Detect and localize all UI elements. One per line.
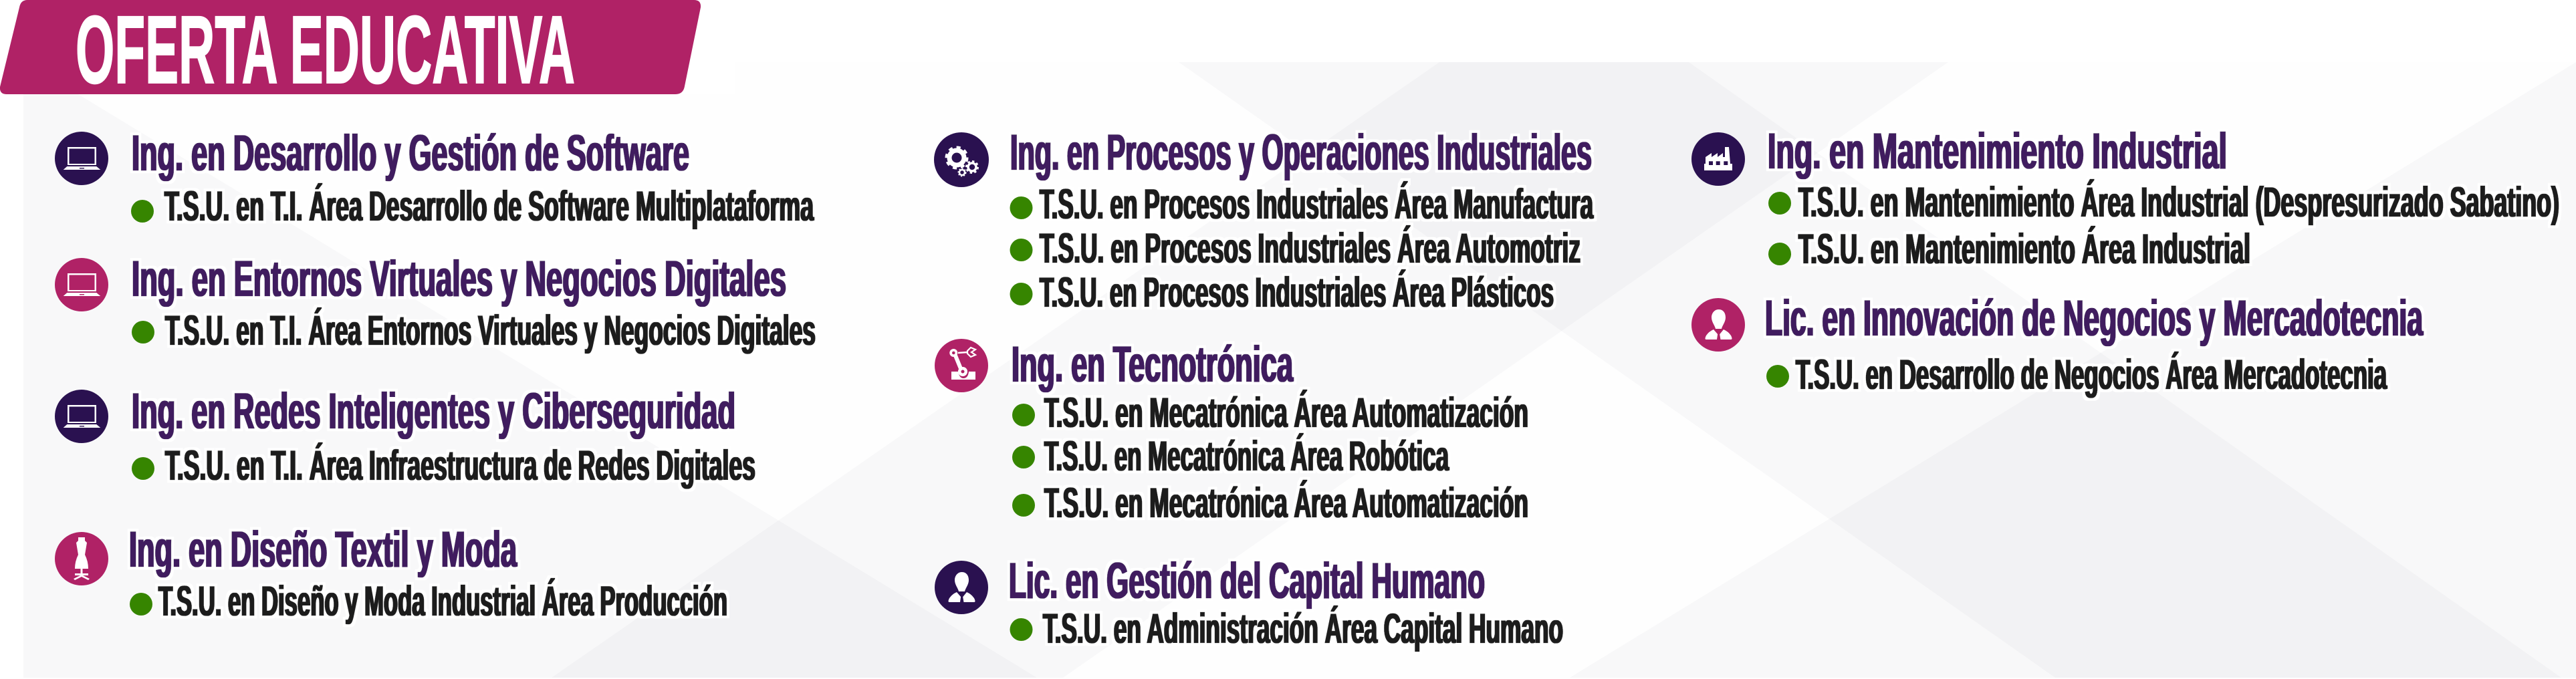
- icon: robot arm: [935, 339, 988, 392]
- career item: T.S.U. en T.I. Área Entornos Virtuales y Negocios Digitales: [165, 307, 816, 354]
- heading: Ing. en Desarrollo y Gestión de Software: [132, 125, 689, 182]
- bullet: [132, 321, 154, 344]
- panel: Ing. en Entornos Virtuales y Negocios Digitales: [55, 251, 816, 354]
- panel: Ing. en Diseño Textil y Moda: [55, 521, 727, 625]
- career item: T.S.U. en T.I. Área Desarrollo de Software Multiplataforma: [164, 183, 814, 230]
- title banner: [0, 0, 701, 104]
- bullet: [130, 593, 152, 616]
- heading: Ing. en Entornos Virtuales y Negocios Digitales: [132, 251, 786, 307]
- bullet: [1012, 494, 1035, 517]
- panel: Ing. en Mantenimiento Industrial: [1691, 123, 2559, 273]
- icon: gears: [934, 132, 989, 187]
- career item: T.S.U. en Administración Área Capital Humano: [1043, 605, 1563, 652]
- heading: Ing. en Procesos y Operaciones Industriales: [1010, 124, 1592, 181]
- career item: T.S.U. en Procesos Industriales Área Manufactura: [1040, 181, 1594, 228]
- panel: Lic. en Gestión del Capital Humano: [935, 553, 1563, 652]
- career item: T.S.U. en Mantenimiento Área Industrial: [1798, 226, 2250, 273]
- career item: T.S.U. en Mecatrónica Área Robótica: [1044, 433, 1449, 480]
- heading: Lic. en Gestión del Capital Humano: [1009, 553, 1485, 609]
- career item: T.S.U. en T.I. Área Infraestructura de Redes Digitales: [165, 442, 755, 489]
- bullet: [1010, 239, 1032, 261]
- bullet: [1766, 365, 1789, 388]
- panel: Ing. en Procesos y Operaciones Industriales: [934, 124, 1594, 316]
- bullet: [1012, 446, 1035, 468]
- career item: T.S.U. en Diseño y Moda Industrial Área Producción: [158, 578, 727, 625]
- icon: factory: [1691, 132, 1745, 186]
- icon: laptop: [55, 258, 108, 311]
- bullet: [1768, 192, 1791, 215]
- career item: T.S.U. en Mecatrónica Área Automatización: [1044, 390, 1528, 436]
- career item: T.S.U. en Mecatrónica Área Automatización: [1044, 480, 1528, 527]
- panel: Lic. en Innovación de Negocios y Mercadotecnia: [1691, 290, 2423, 398]
- heading: Ing. en Mantenimiento Industrial: [1768, 123, 2227, 180]
- icon: laptop: [55, 390, 108, 443]
- bullet: [1010, 618, 1032, 641]
- icon: mannequin: [55, 532, 108, 585]
- icon: person: [935, 561, 988, 614]
- bullet: [132, 457, 154, 480]
- heading: Ing. en Diseño Textil y Moda: [129, 521, 517, 578]
- panel: Ing. en Redes Inteligentes y Ciberseguridad: [55, 383, 755, 489]
- career item: T.S.U. en Procesos Industriales Área Plásticos: [1040, 269, 1554, 316]
- panel: Ing. en Tecnotrónica: [935, 336, 1528, 527]
- icon: person: [1691, 298, 1745, 352]
- panel: Ing. en Desarrollo y Gestión de Software: [55, 125, 814, 230]
- bullet: [1012, 404, 1035, 426]
- heading: Ing. en Tecnotrónica: [1012, 336, 1293, 393]
- bullet: [1010, 283, 1032, 305]
- bullet: [131, 200, 154, 223]
- icon: laptop: [55, 132, 108, 185]
- bullet: [1768, 243, 1791, 265]
- bullet: [1010, 196, 1032, 219]
- career item: T.S.U. en Procesos Industriales Área Automotriz: [1040, 225, 1580, 272]
- heading: Ing. en Redes Inteligentes y Ciberseguridad: [132, 383, 735, 440]
